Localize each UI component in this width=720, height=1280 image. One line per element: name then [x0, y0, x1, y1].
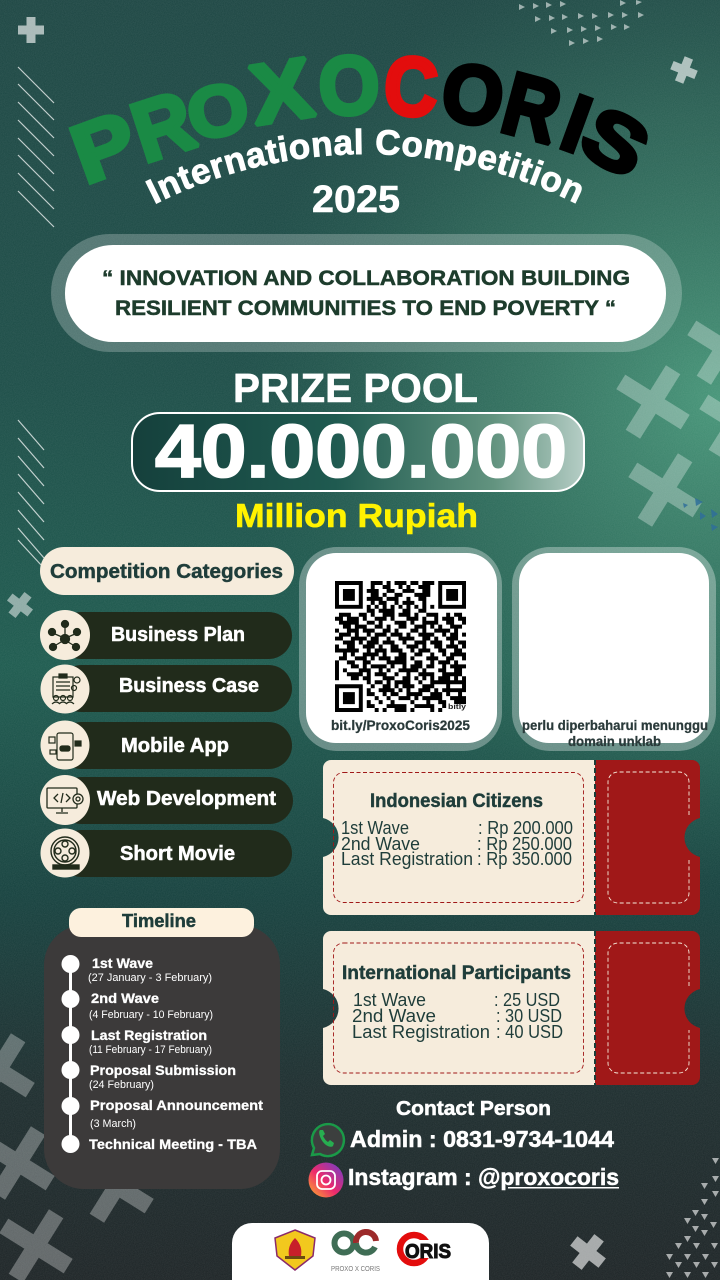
title: PROXOCORIS curved wordmark: P [60, 93, 149, 201]
subtitle: International Competition: International Competition [145, 128, 582, 204]
title: PROXOCORIS curved wordmark: X [244, 40, 319, 143]
ticket: international participants: Last Registration [352, 1022, 490, 1042]
categories heading: Competition Categories [50, 561, 283, 583]
title: PROXOCORIS curved wordmark: S [567, 89, 663, 195]
ticket: Indonesian citizens: 2nd Wave [341, 834, 420, 854]
logo: proxo x coris [331, 1232, 380, 1273]
title: PROXOCORIS curved wordmark [60, 38, 663, 201]
category: web development [40, 775, 293, 825]
timeline entries: (27 January - 3 February) [88, 972, 212, 984]
prize pool heading: PRIZE POOL [233, 365, 478, 411]
timeline entries: 2nd Wave [91, 990, 159, 1006]
QR code [335, 583, 466, 710]
ticket: international participants: 2nd Wave [352, 1006, 436, 1026]
title: PROXOCORIS curved wordmark: O [317, 39, 381, 134]
ticket: international participants: International Participants [342, 963, 571, 984]
category: business plan: Business Plan [111, 624, 245, 646]
timeline entries: (11 February - 17 February) [89, 1044, 212, 1056]
category: business plan [40, 610, 292, 660]
title: PROXOCORIS curved wordmark: O [180, 65, 256, 156]
contact heading: Contact Person [396, 1098, 551, 1120]
year 2025: 2025 [312, 179, 400, 221]
icon: whatsapp [312, 1124, 344, 1156]
ticket: international participants: 1st Wave [353, 990, 426, 1010]
QR link: bit.ly/ProxoCoris2025 [331, 718, 470, 733]
timeline entries: Proposal Submission [90, 1062, 236, 1078]
ticket: Indonesian citizens: Indonesian Citizens [370, 791, 543, 812]
timeline entries: 1st Wave [92, 955, 153, 971]
ticket: international participants: : 25 USD [494, 990, 560, 1010]
ticket: Indonesian citizens: Last Registration [341, 849, 473, 869]
ticket: international participants: : 40 USD [496, 1022, 563, 1042]
logo: coris: ORIS [405, 1241, 451, 1263]
panel: competition categories [40, 547, 294, 878]
category: short movie [40, 828, 292, 878]
ticket: Indonesian citizens: : Rp 200.000 [478, 818, 573, 838]
title: PROXOCORIS curved wordmark: R [121, 72, 205, 181]
category: short movie: Short Movie [120, 843, 235, 865]
panel: timeline [44, 908, 280, 1189]
prize amount box: 40.000.000 [155, 409, 567, 493]
slogan pill: RESILIENT COMMUNITIES TO END POVERTY “ [115, 296, 616, 320]
instagram handle: Instagram : @proxocoris [348, 1164, 619, 1190]
panel: website placeholder card: domain unklab [568, 734, 661, 749]
timeline entries: (4 February - 10 February) [89, 1009, 213, 1021]
ticket: Indonesian citizens [323, 760, 700, 915]
title: PROXOCORIS curved wordmark: C [381, 38, 441, 135]
timeline entries: (24 February) [89, 1079, 154, 1091]
category: mobile app: Mobile App [121, 735, 229, 757]
logo: university shield [275, 1230, 315, 1270]
timeline heading: Timeline [122, 911, 196, 931]
categories heading [40, 547, 294, 595]
bitly mark: bitly [448, 704, 466, 711]
slogan pill [51, 234, 682, 352]
ticket: Indonesian citizens: : Rp 350.000 [477, 849, 572, 869]
category: business case: Business Case [119, 675, 259, 697]
ticket: international participants [323, 931, 700, 1085]
ticket: Indonesian citizens: 1st Wave [341, 818, 409, 838]
timeline entries: Proposal Announcement [90, 1097, 263, 1113]
panel: website placeholder card: perlu diperbaharui menunggu [522, 718, 708, 733]
title: PROXOCORIS curved wordmark: O [436, 45, 509, 146]
category: web development: Web Development [97, 788, 276, 810]
timeline entries: Technical Meeting - TBA [89, 1136, 257, 1152]
category: business case [40, 664, 292, 714]
panel: website placeholder card [512, 547, 716, 751]
timeline entries: Last Registration [91, 1027, 207, 1043]
timeline entries [88, 955, 263, 1152]
logo: coris [400, 1235, 452, 1263]
category: mobile app [40, 720, 292, 770]
timeline entries: (3 March) [90, 1118, 136, 1130]
panel: sponsor logos [232, 1223, 489, 1280]
title: PROXOCORIS curved wordmark: I [551, 77, 602, 170]
timeline track [62, 955, 80, 1153]
slogan pill: “ INNOVATION AND COLLABORATION BUILDING [102, 266, 630, 290]
admin phone: Admin : 0831-9734-1044 [350, 1126, 614, 1152]
logo: proxo x coris: PROXO X CORIS [331, 1266, 380, 1273]
timeline heading [69, 908, 254, 937]
icon: instagram [308, 1162, 344, 1198]
million rupiah: Million Rupiah [235, 497, 478, 534]
title: PROXOCORIS curved wordmark: R [493, 54, 571, 163]
ticket: international participants: : 30 USD [496, 1006, 562, 1026]
ticket: Indonesian citizens: : Rp 250.000 [477, 834, 572, 854]
panel: QR code card [299, 547, 502, 751]
